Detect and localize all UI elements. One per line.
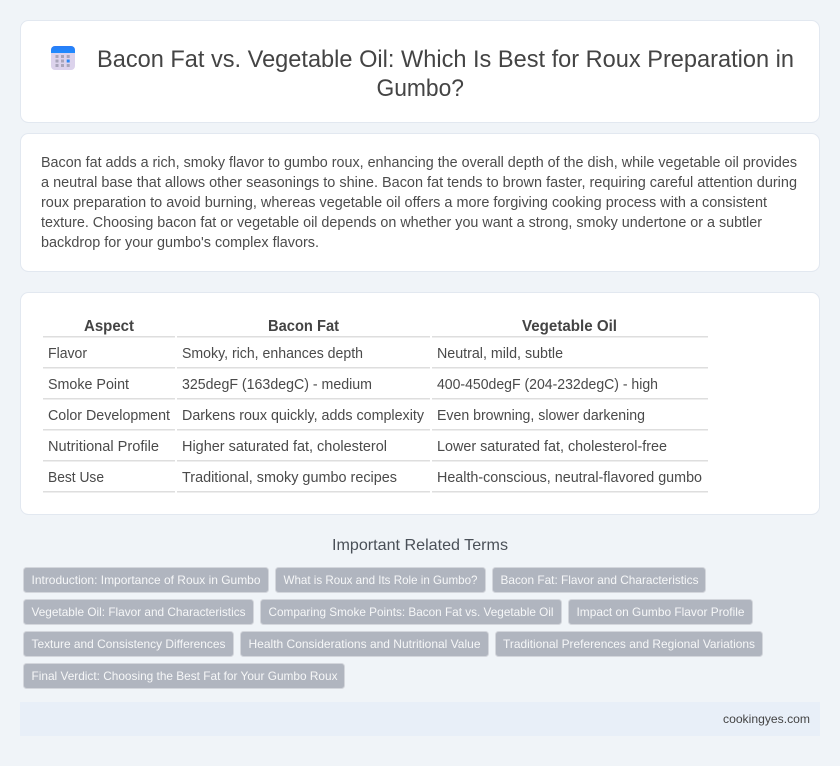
tag: Traditional Preferences and Regional Variations — [503, 637, 755, 651]
tag — [240, 632, 488, 656]
tag: Comparing Smoke Points: Bacon Fat vs. Vegetable Oil — [268, 605, 554, 619]
tag — [24, 632, 234, 656]
related term tags — [24, 568, 762, 688]
tag: Final Verdict: Choosing the Best Fat for Your Gumbo Roux — [32, 669, 338, 683]
tag: What is Roux and Its Role in Gumbo? — [284, 573, 478, 587]
tag — [24, 600, 254, 624]
summary text: a neutral base that allows other seasonings to shine. Bacon fat tends to brown faster, requiring careful attention during — [41, 175, 797, 191]
tag — [568, 600, 752, 624]
table row: smoke point: 400-450degF (204-232degC) - high — [437, 377, 658, 393]
title — [97, 46, 794, 102]
table row: smoke point: Smoke Point — [48, 377, 129, 393]
tag: Bacon Fat: Flavor and Characteristics — [500, 573, 698, 587]
table row: color development: Color Development — [48, 408, 170, 424]
panel: header — [20, 20, 820, 122]
table row: nutritional profile: Higher saturated fat, cholesterol — [182, 439, 387, 455]
table header — [84, 318, 617, 335]
table row: best use: Health-conscious, neutral-flavored gumbo — [437, 470, 702, 486]
table row: color development — [48, 408, 645, 424]
section heading: related terms: Important Related Terms — [332, 537, 508, 554]
tag — [492, 568, 706, 592]
summary text: roux preparation to avoid burning, whereas vegetable oil offers a more forgiving cooking process with a consistent — [41, 195, 767, 211]
tag — [276, 568, 486, 592]
panel: comparison table — [20, 292, 820, 514]
title: Bacon Fat vs. Vegetable Oil: Which Is Best for Roux Preparation in — [97, 46, 794, 73]
panel: summary — [20, 134, 820, 272]
table row: flavor: Flavor — [48, 346, 87, 362]
table header: Vegetable Oil — [522, 318, 617, 335]
table row: color development: Darkens roux quickly, adds complexity — [182, 408, 425, 424]
footer — [20, 702, 820, 736]
icon: calendar — [51, 46, 75, 70]
table row: flavor: Neutral, mild, subtle — [437, 346, 563, 362]
table row: nutritional profile — [48, 439, 667, 455]
table row: smoke point: 325degF (163degC) - medium — [182, 377, 372, 393]
table row: nutritional profile: Nutritional Profile — [48, 439, 159, 455]
table row: nutritional profile: Lower saturated fat, cholesterol-free — [437, 439, 667, 455]
summary text: backdrop for your gumbo's complex flavors. — [41, 235, 319, 251]
table row: best use: Traditional, smoky gumbo recipes — [182, 470, 397, 486]
tag: Texture and Consistency Differences — [32, 637, 226, 651]
summary text — [41, 155, 797, 251]
footer: cookingyes.com — [723, 712, 810, 726]
title: Gumbo? — [376, 75, 464, 102]
tag: Vegetable Oil: Flavor and Characteristics — [32, 605, 246, 619]
table row: flavor: Smoky, rich, enhances depth — [182, 346, 363, 362]
table row: best use — [48, 470, 702, 486]
table header: Aspect — [84, 318, 135, 335]
table row: smoke point — [48, 377, 658, 393]
table row: flavor — [48, 346, 563, 362]
tag — [24, 664, 344, 688]
tag — [24, 568, 268, 592]
table row: color development: Even browning, slower darkening — [437, 408, 645, 424]
tag — [496, 632, 762, 656]
table header: Bacon Fat — [268, 318, 340, 335]
tag: Introduction: Importance of Roux in Gumbo — [32, 573, 261, 587]
tag: Impact on Gumbo Flavor Profile — [576, 605, 745, 619]
tag — [260, 600, 562, 624]
summary text: texture. Choosing bacon fat or vegetable oil depends on whether you want a strong, smoky undertone or a subtler — [41, 215, 762, 231]
table row: best use: Best Use — [48, 470, 104, 486]
tag: Health Considerations and Nutritional Value — [248, 637, 481, 651]
summary text: Bacon fat adds a rich, smoky flavor to gumbo roux, enhancing the overall depth of the dish, while vegetable oil provides — [41, 155, 797, 171]
